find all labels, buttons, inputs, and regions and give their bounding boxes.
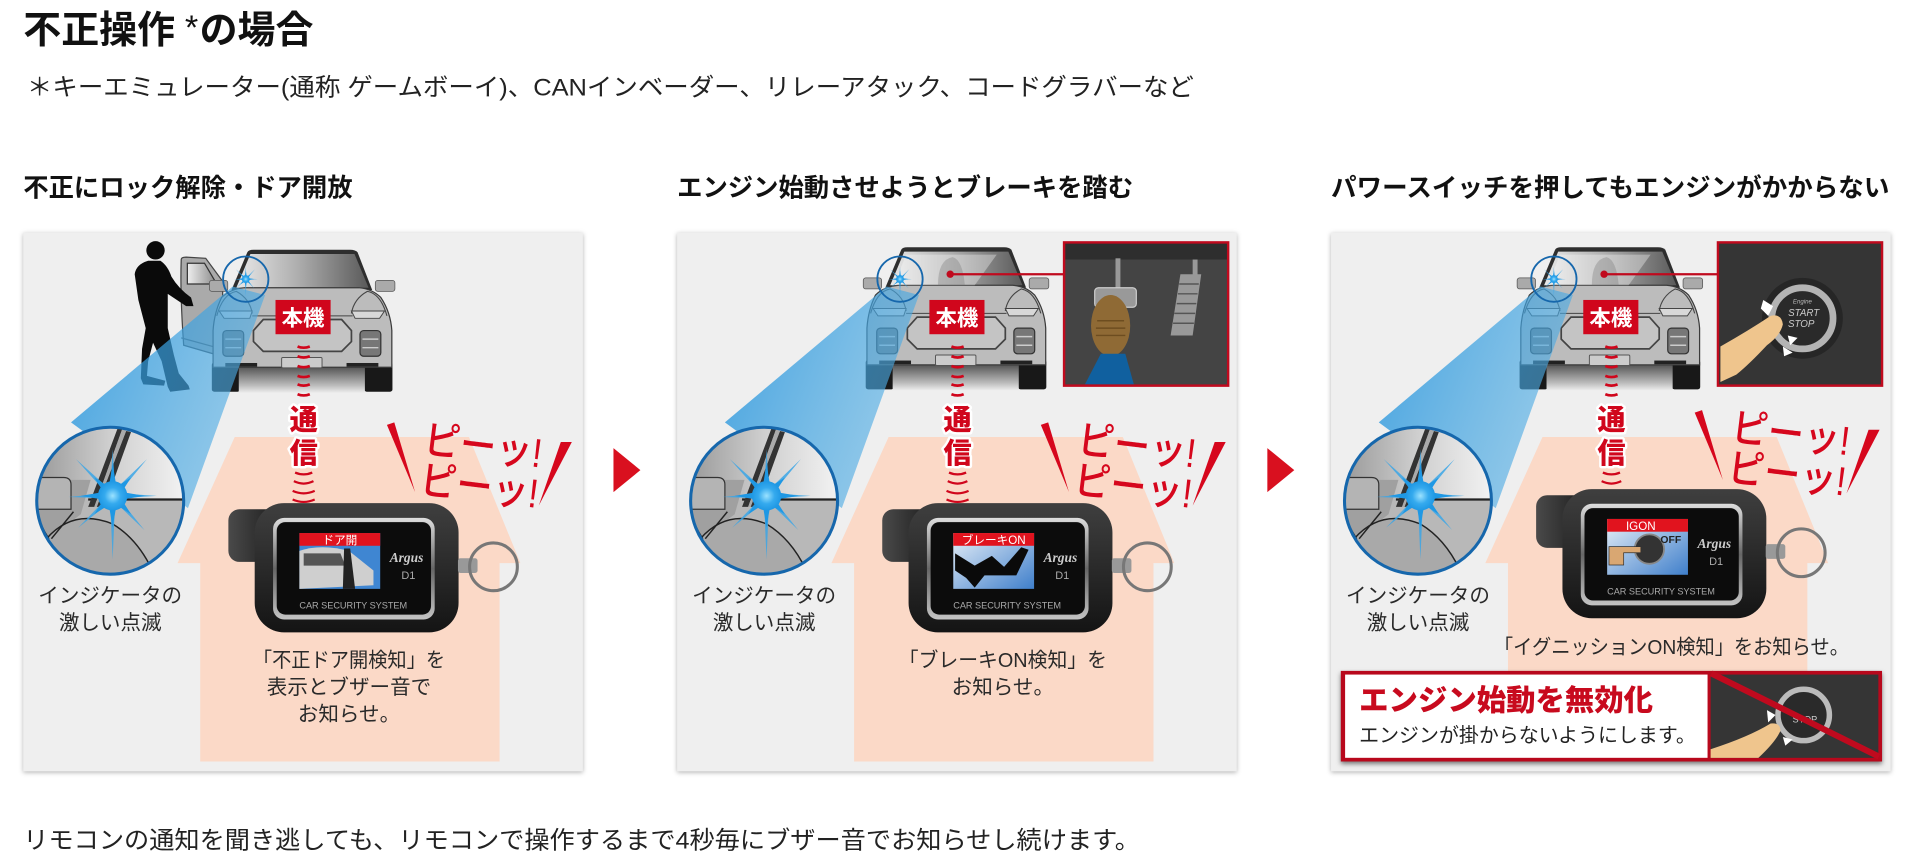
remote: Argus <box>1696 536 1731 551</box>
caption: remote: お知らせ。 <box>298 703 400 726</box>
pointer line <box>1600 271 1718 278</box>
pointer line <box>947 271 1064 278</box>
unit label <box>1583 300 1638 334</box>
inset: brake pedal <box>1064 242 1228 386</box>
banner: engine start disabled <box>1341 671 1882 761</box>
beep spikes <box>1041 422 1226 506</box>
caption: indicator: 激しい点滅 <box>1367 611 1470 634</box>
car <box>209 250 395 393</box>
title: の場合 <box>200 10 313 52</box>
title: 不正操作 <box>23 10 175 52</box>
unit label <box>276 300 331 334</box>
inset: power button: START <box>1788 308 1820 319</box>
heading: step 3: パワースイッチを押してもエンジンがかからない <box>1331 173 1889 202</box>
caption: remote <box>253 649 445 726</box>
banner button image: STOP <box>1792 714 1817 724</box>
communication label <box>943 405 972 469</box>
lower waves <box>947 473 969 502</box>
remote: D1 <box>1709 556 1723 568</box>
screen: brake on: ブレーキON <box>962 533 1026 547</box>
inset: power button: Engine <box>1793 299 1813 306</box>
open car door <box>181 257 223 356</box>
beep spikes <box>387 422 572 506</box>
indicator small circle <box>1531 256 1577 302</box>
beep text: ピーッ! <box>1725 444 1849 505</box>
remote: Argus <box>1043 550 1077 565</box>
heading: step 1: 不正にロック解除・ドア開放 <box>23 174 353 202</box>
communication waves <box>1605 346 1618 395</box>
beep text: ピーッ! <box>1729 404 1853 464</box>
caption: indicator: インジケータの <box>38 584 182 607</box>
caption: remote: 「ブレーキON検知」を <box>899 648 1107 672</box>
title <box>23 9 313 52</box>
banner button image <box>1711 673 1879 758</box>
caption: indicator: インジケータの <box>1346 584 1490 607</box>
indicator detail circle <box>684 427 844 588</box>
arrow 2 <box>1267 448 1294 492</box>
screen: door open <box>299 533 380 589</box>
panel background <box>677 233 1237 771</box>
communication label: 信 <box>290 438 318 469</box>
title: * <box>185 9 198 47</box>
banner text: エンジンが掛からないようにします。 <box>1359 724 1696 747</box>
unit label: 本機 <box>282 307 325 331</box>
car <box>863 247 1049 391</box>
communication label <box>1597 405 1626 469</box>
subtitle note: ＊キーエミュレーター(通称 ゲームボーイ)、CANインベーダー、リレーアタック、コードグラバーなど <box>27 73 1194 101</box>
inset: power button <box>1718 242 1882 386</box>
remote: CAR SECURITY SYSTEM <box>1607 586 1715 596</box>
house shape <box>178 437 520 761</box>
beep text: ピーッ! <box>421 416 545 476</box>
remote <box>228 503 517 632</box>
communication label: 信 <box>943 438 972 469</box>
caption: remote: 表示とブザー音で <box>267 675 431 699</box>
screen: ignition on: OFF <box>1660 535 1681 546</box>
panel background <box>1331 233 1891 771</box>
indicator light beam <box>71 286 265 508</box>
remote <box>1536 489 1825 618</box>
person silhouette <box>135 241 193 392</box>
communication label <box>290 405 318 469</box>
caption: indicator: 激しい点滅 <box>59 611 162 634</box>
heading: step 2: エンジン始動させようとブレーキを踏む <box>677 173 1133 202</box>
unit label <box>929 300 984 334</box>
house shape <box>1485 437 1828 761</box>
caption: indicator: 激しい点滅 <box>713 611 816 634</box>
beep text <box>418 416 545 517</box>
car <box>1517 247 1703 391</box>
house shape <box>831 437 1174 761</box>
beep spikes <box>1695 410 1880 493</box>
caption: indicator <box>38 584 182 634</box>
remote <box>882 503 1171 632</box>
beep text: ピーッ! <box>1075 416 1199 476</box>
remote: CAR SECURITY SYSTEM <box>953 600 1061 610</box>
screen: brake on <box>953 533 1034 589</box>
indicator detail circle <box>31 427 190 588</box>
caption: indicator <box>692 584 836 634</box>
panel: step 2 <box>677 173 1237 771</box>
screen: door open: ドア開 <box>322 534 357 547</box>
remote: D1 <box>1055 570 1069 582</box>
remote: D1 <box>401 570 415 582</box>
communication waves <box>298 346 310 395</box>
caption: remote: 「不正ドア開検知」を <box>253 649 445 672</box>
caption: remote <box>899 648 1107 699</box>
lower waves <box>1602 473 1621 484</box>
beep text: ピーッ! <box>1072 457 1195 517</box>
panel: step 1 <box>23 174 583 771</box>
indicator small circle <box>877 256 923 302</box>
remote: Argus <box>389 550 423 565</box>
arrow 1 <box>613 448 640 492</box>
indicator light beam <box>1379 286 1573 508</box>
communication waves <box>951 346 964 395</box>
screen: ignition on <box>1607 519 1688 575</box>
beep text <box>1072 416 1199 517</box>
panel: step 3 <box>1331 173 1891 771</box>
unit label: 本機 <box>1589 307 1633 331</box>
remote: CAR SECURITY SYSTEM <box>299 600 407 610</box>
caption: remote: お知らせ。 <box>952 676 1054 699</box>
beep text: ピーッ! <box>418 457 541 517</box>
caption: indicator <box>1346 584 1490 634</box>
communication label: 通 <box>943 405 972 436</box>
communication label: 通 <box>1597 405 1626 436</box>
indicator light beam <box>725 286 919 508</box>
banner heading: エンジン始動を無効化 <box>1359 685 1653 718</box>
inset: power button: STOP <box>1788 319 1815 330</box>
unit label: 本機 <box>936 307 979 331</box>
communication label: 通 <box>290 405 318 436</box>
caption: indicator: インジケータの <box>692 584 836 607</box>
footer note: リモコンの通知を聞き逃しても、リモコンで操作するまで4秒毎にブザー音でお知らせし続けます。 <box>23 826 1140 854</box>
caption: remote: 「イグニッションON検知」をお知らせ。 <box>1494 636 1849 659</box>
beep text <box>1725 404 1853 505</box>
panel background <box>23 233 583 771</box>
screen: ignition on: IGON <box>1626 520 1656 533</box>
indicator small circle <box>223 256 268 302</box>
communication label: 信 <box>1597 438 1626 469</box>
lower waves <box>293 473 315 502</box>
indicator detail circle <box>1338 427 1498 588</box>
